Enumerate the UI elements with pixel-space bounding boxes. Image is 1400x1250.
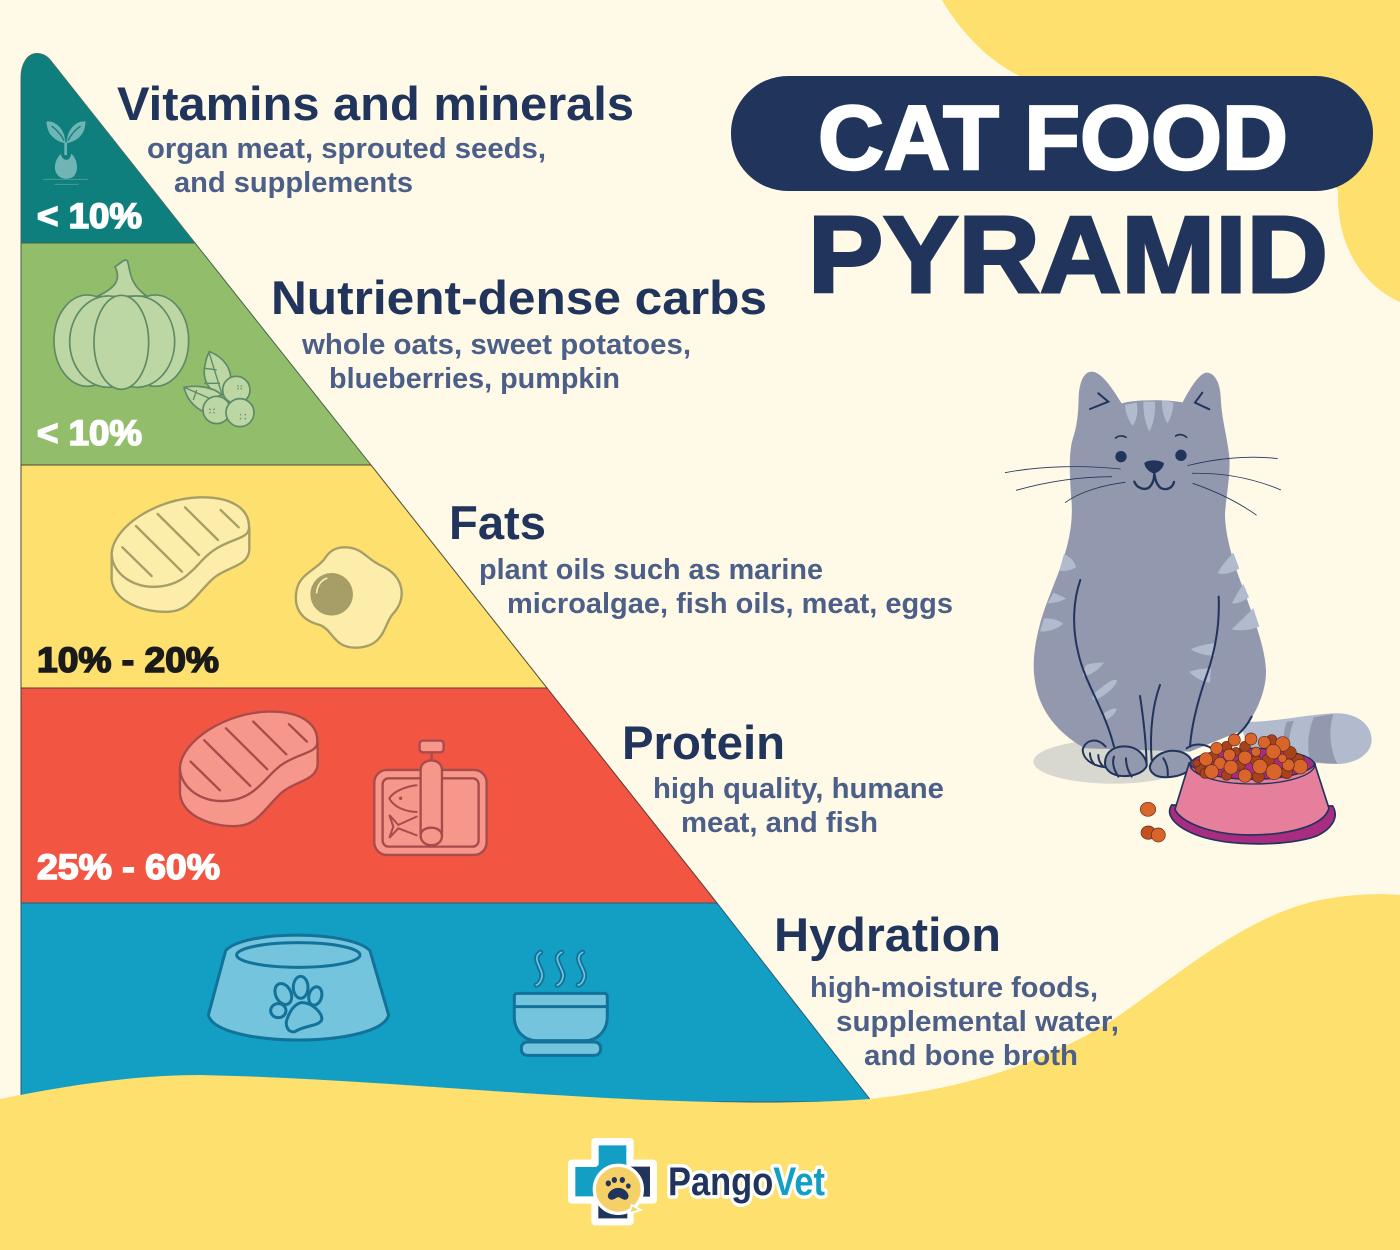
text block: vitamins and minerals: Vitamins and minerals xyxy=(117,77,634,130)
text block: hydration: supplemental water, xyxy=(836,1006,1119,1038)
cat shadow xyxy=(1033,740,1193,784)
percentage: protein: 25% - 60% xyxy=(37,848,220,887)
cat tail xyxy=(1240,713,1372,764)
text block: protein: Protein xyxy=(622,716,785,769)
text block: nutrient-dense carbs: blueberries, pumpkin xyxy=(329,363,620,395)
logo: PangoVet xyxy=(572,1142,825,1222)
logo wordmark: PangoVet xyxy=(668,1160,825,1204)
text block: nutrient-dense carbs: Nutrient-dense carbs xyxy=(271,271,767,324)
text block: hydration xyxy=(774,908,1119,1072)
tier: fats xyxy=(21,465,547,688)
cat stripes xyxy=(1040,401,1259,721)
icon: raw steak (protein) xyxy=(180,712,318,826)
percentage: fats: 10% - 20% xyxy=(37,641,219,680)
cat whiskers xyxy=(1005,457,1281,515)
percentage: carbs: < 10% xyxy=(37,414,142,453)
tier: hydration xyxy=(21,903,872,1102)
tier: vitamins and minerals xyxy=(21,54,195,243)
icon: sprout xyxy=(43,121,88,184)
title pill: cat food: CAT FOOD xyxy=(818,88,1288,189)
icon: blueberries and leaves xyxy=(184,352,254,427)
tier: nutrient-dense carbs xyxy=(21,243,371,465)
illustration: cat with bowl xyxy=(1005,372,1372,784)
title: pyramid: PYRAMID xyxy=(808,194,1328,316)
text block: protein: high quality, humane xyxy=(653,773,944,805)
bowl rim xyxy=(1190,748,1315,782)
icon: tin of fish xyxy=(374,741,487,855)
spilled kibble xyxy=(1140,802,1165,842)
cat body xyxy=(1034,372,1266,752)
text block: nutrient-dense carbs xyxy=(271,271,767,395)
text block: protein: meat, and fish xyxy=(681,807,878,839)
text block: vitamins and minerals: and supplements xyxy=(174,167,413,199)
text block: fats: Fats xyxy=(449,496,546,549)
text block: hydration: and bone broth xyxy=(864,1040,1078,1072)
icon: food bowl with kibble xyxy=(1140,733,1335,844)
icon: water bowl with paw xyxy=(208,935,389,1040)
kibble pile xyxy=(1193,733,1308,783)
icon: pumpkin xyxy=(54,260,189,389)
background wave: bottom xyxy=(0,894,1400,1250)
icon: fried egg xyxy=(296,547,402,648)
background blob: top right xyxy=(942,0,1400,302)
text block: fats xyxy=(449,496,953,620)
text block: vitamins and minerals xyxy=(117,77,634,199)
text block: fats: microalgae, fish oils, meat, eggs xyxy=(507,588,953,620)
tier: protein xyxy=(21,688,717,903)
text block: hydration: high-moisture foods, xyxy=(810,972,1098,1004)
icon: steaming soup bowl xyxy=(514,952,607,1055)
logo mark xyxy=(572,1142,653,1222)
pyramid xyxy=(21,54,872,1102)
icon: cooked steak (fats) xyxy=(112,497,249,612)
bowl body xyxy=(1175,763,1329,835)
cat legs and paws xyxy=(1074,580,1252,777)
text block: hydration: Hydration xyxy=(774,908,1001,961)
text block: vitamins and minerals: organ meat, sprouted seeds, xyxy=(147,133,546,165)
percentage: vitamins: < 10% xyxy=(37,197,142,236)
title pill: cat food xyxy=(731,76,1373,191)
text block: protein xyxy=(622,716,944,839)
bowl base xyxy=(1170,805,1335,844)
text block: fats: plant oils such as marine xyxy=(479,554,823,586)
cat face xyxy=(1090,393,1209,489)
text block: nutrient-dense carbs: whole oats, sweet potatoes, xyxy=(301,329,691,361)
